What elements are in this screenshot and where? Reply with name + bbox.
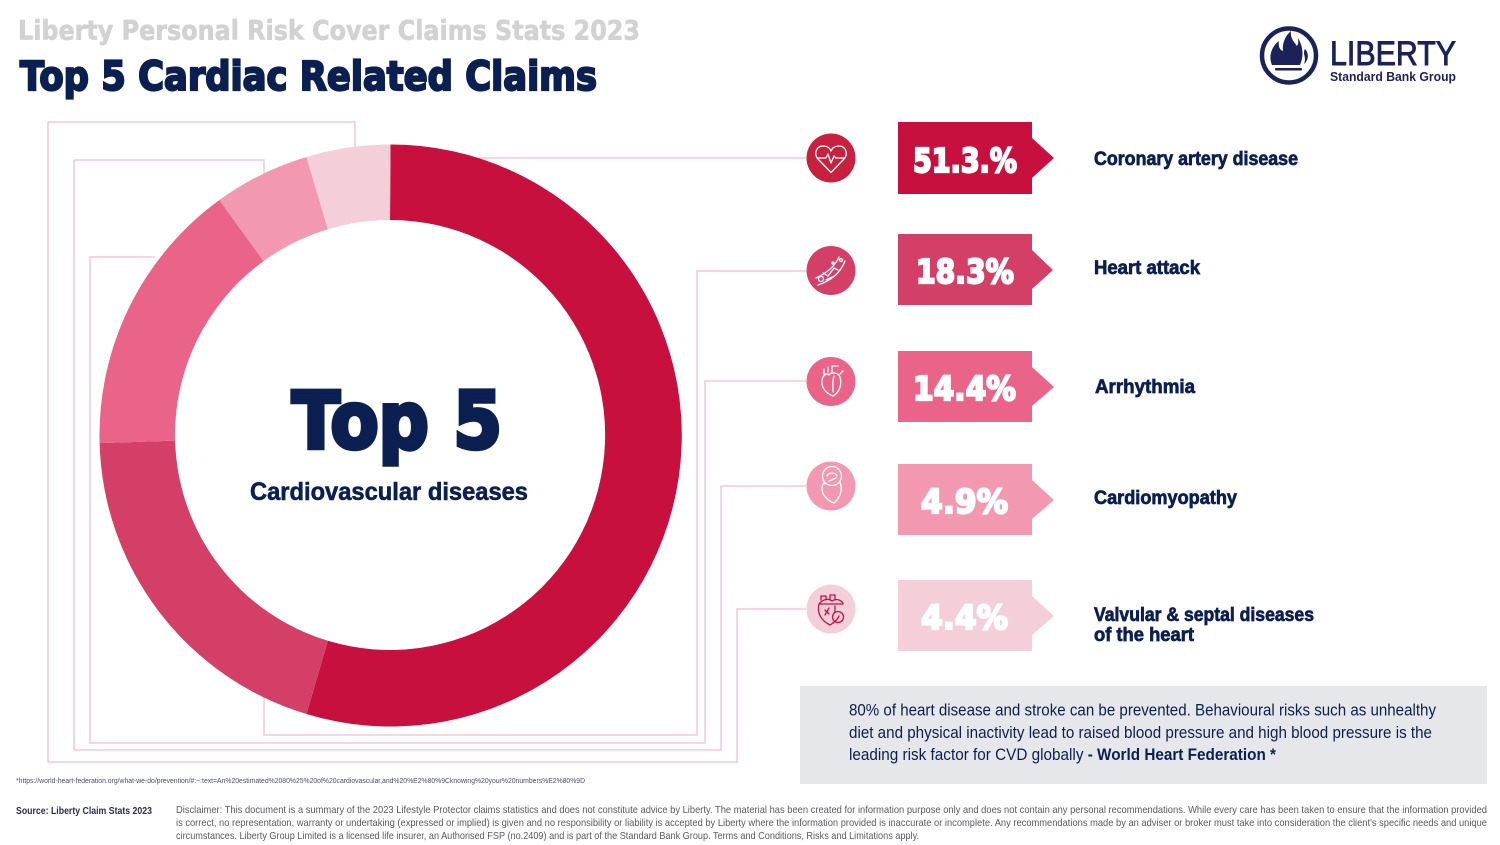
segment: cardiomyopathy	[219, 157, 328, 261]
donut centre heading: Top 5	[292, 377, 502, 467]
label: Cardiomyopathy	[1094, 488, 1237, 509]
callout: World Heart Federation: 80% of heart disease and stroke can be prevented. Behavioural risks such as unhealthy	[849, 700, 1436, 720]
label: Arrhythmia	[1095, 377, 1195, 398]
row: heart attack	[806, 234, 1200, 305]
footnote URL: *https://world-heart-federation.org/what-we-do/prevention/#:~:text=An%20estimated%2080%25%20of%20cardiovascular,and%20%E2%80%9Cknowing%20your%20numbers%E2%80%9D	[16, 778, 585, 785]
tag: 4.4%	[898, 580, 1054, 651]
row: coronary artery disease	[806, 122, 1298, 194]
value: 4.9%: 4.9%	[921, 482, 1008, 521]
logo: Liberty: Standard Bank Group	[1330, 69, 1456, 84]
segment: arrhythmia	[99, 200, 264, 443]
value: 51.3%: 51.3.%	[913, 141, 1017, 180]
disclaimer	[176, 804, 1487, 842]
value: 14.4%: 14.4%	[913, 369, 1016, 408]
label: Valvular & septal diseases	[1094, 605, 1314, 626]
icon: heart with valve	[806, 584, 856, 634]
icon: artery	[806, 246, 856, 295]
row: arrhythmia	[806, 351, 1195, 422]
segment: valvular and septal diseases	[306, 144, 390, 229]
connector lines	[48, 122, 806, 762]
icon: heart with pulse	[806, 134, 856, 182]
title: Top 5 Cardiac Related Claims	[20, 54, 597, 100]
donut chart	[99, 144, 682, 726]
label	[1094, 605, 1314, 646]
subtitle: Liberty Personal Risk Cover Claims Stats 2023	[18, 16, 640, 46]
source: Source: Liberty Claim Stats 2023	[16, 805, 152, 817]
label: Heart attack	[1094, 258, 1200, 279]
logo: Liberty	[1262, 28, 1456, 84]
tag: 51.3%	[898, 122, 1054, 194]
segment: heart attack	[100, 441, 328, 714]
tag: 14.4%	[898, 351, 1054, 422]
callout: World Heart Federation: diet and physical inactivity lead to raised blood pressure and high blood pressure is the	[849, 723, 1432, 742]
segment: coronary artery disease	[306, 144, 682, 726]
callout: World Heart Federation	[800, 686, 1487, 784]
row: cardiomyopathy	[806, 462, 1237, 535]
disclaimer: circumstances. Liberty Group Limited is a licensed life insurer, an Authorised FSP (no.2409) and is part of the Standard Bank Group. Terms and Conditions, Risks and Limitations apply.	[176, 830, 919, 842]
value: 18.3%: 18.3%	[916, 252, 1014, 291]
row: valvular and septal diseases	[806, 580, 1314, 651]
icon: anatomical heart	[806, 357, 856, 406]
icon: heart with magnifier	[806, 462, 856, 510]
logo: Liberty: LIBERTY	[1330, 35, 1456, 73]
tag: 18.3%	[898, 234, 1053, 305]
label: of the heart	[1094, 625, 1195, 646]
tag: 4.9%	[898, 464, 1054, 535]
label: Coronary artery disease	[1094, 149, 1298, 170]
callout: World Heart Federation: leading risk factor for CVD globally - World Heart Federation *	[849, 745, 1276, 764]
value: 4.4%: 4.4%	[921, 598, 1008, 637]
donut centre subheading: Cardiovascular diseases	[250, 478, 528, 506]
